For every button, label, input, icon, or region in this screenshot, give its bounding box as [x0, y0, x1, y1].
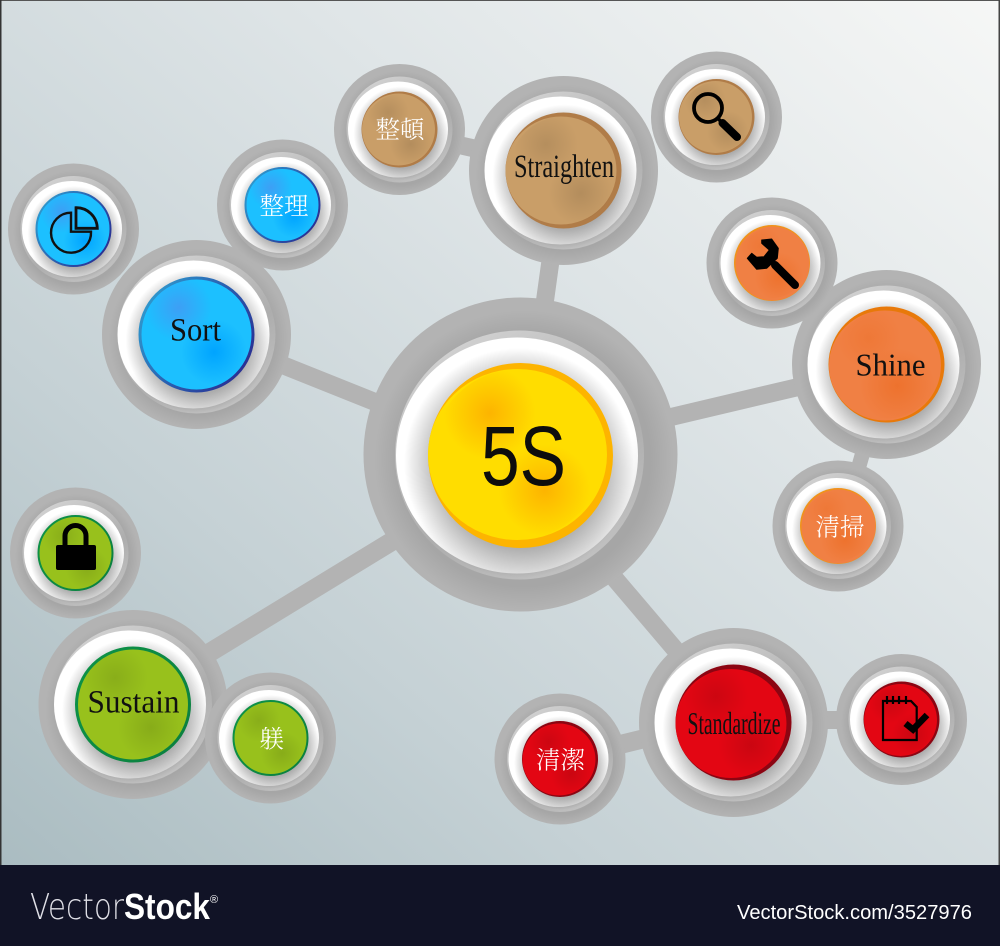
small node: lock icon — [10, 488, 141, 618]
small node: wrench icon — [706, 198, 838, 328]
small node: magnifier icon — [651, 52, 782, 182]
node: Shine: Shine — [856, 346, 926, 382]
icon: pie chart — [51, 208, 97, 253]
node: Standardize: Standardize — [688, 705, 780, 741]
footer image id: VectorStock.com/3527976 — [737, 902, 972, 924]
node: Straighten — [469, 76, 658, 265]
small node: 躾: 躾 — [260, 726, 284, 754]
node: Shine — [792, 270, 981, 459]
small node: pie chart icon — [8, 164, 139, 294]
footer bar — [0, 865, 1000, 946]
node: Sort — [102, 240, 291, 429]
center node: 5S — [364, 298, 678, 612]
icon: wrench — [747, 239, 795, 285]
small node: 清潔: 清潔 — [536, 746, 585, 774]
center label: 5S — [481, 409, 566, 503]
node: Sustain: Sustain — [88, 684, 180, 720]
small node: 清掃: 清掃 — [816, 514, 864, 542]
icon: notepad with check mark — [883, 696, 927, 740]
icon: padlock — [56, 526, 96, 570]
footer logo: VectorStock — [30, 886, 222, 928]
small node: 清潔 — [494, 694, 626, 824]
icon: magnifier — [694, 94, 737, 137]
connectors — [195, 143, 865, 747]
small node: 整頓 — [334, 64, 465, 195]
small node: 躾 — [205, 672, 336, 804]
small node: 整理: 整理 — [260, 192, 308, 220]
node: Sustain — [38, 610, 228, 799]
node: Straighten: Straighten — [514, 149, 614, 185]
small node: notepad icon — [836, 654, 967, 785]
small node: 整理 — [217, 140, 348, 270]
small node: 清掃 — [772, 460, 904, 592]
footer logo: ® — [210, 894, 218, 906]
small node: 整頓: 整頓 — [376, 116, 425, 144]
node: Standardize — [639, 628, 828, 817]
node: Sort: Sort — [170, 312, 221, 348]
